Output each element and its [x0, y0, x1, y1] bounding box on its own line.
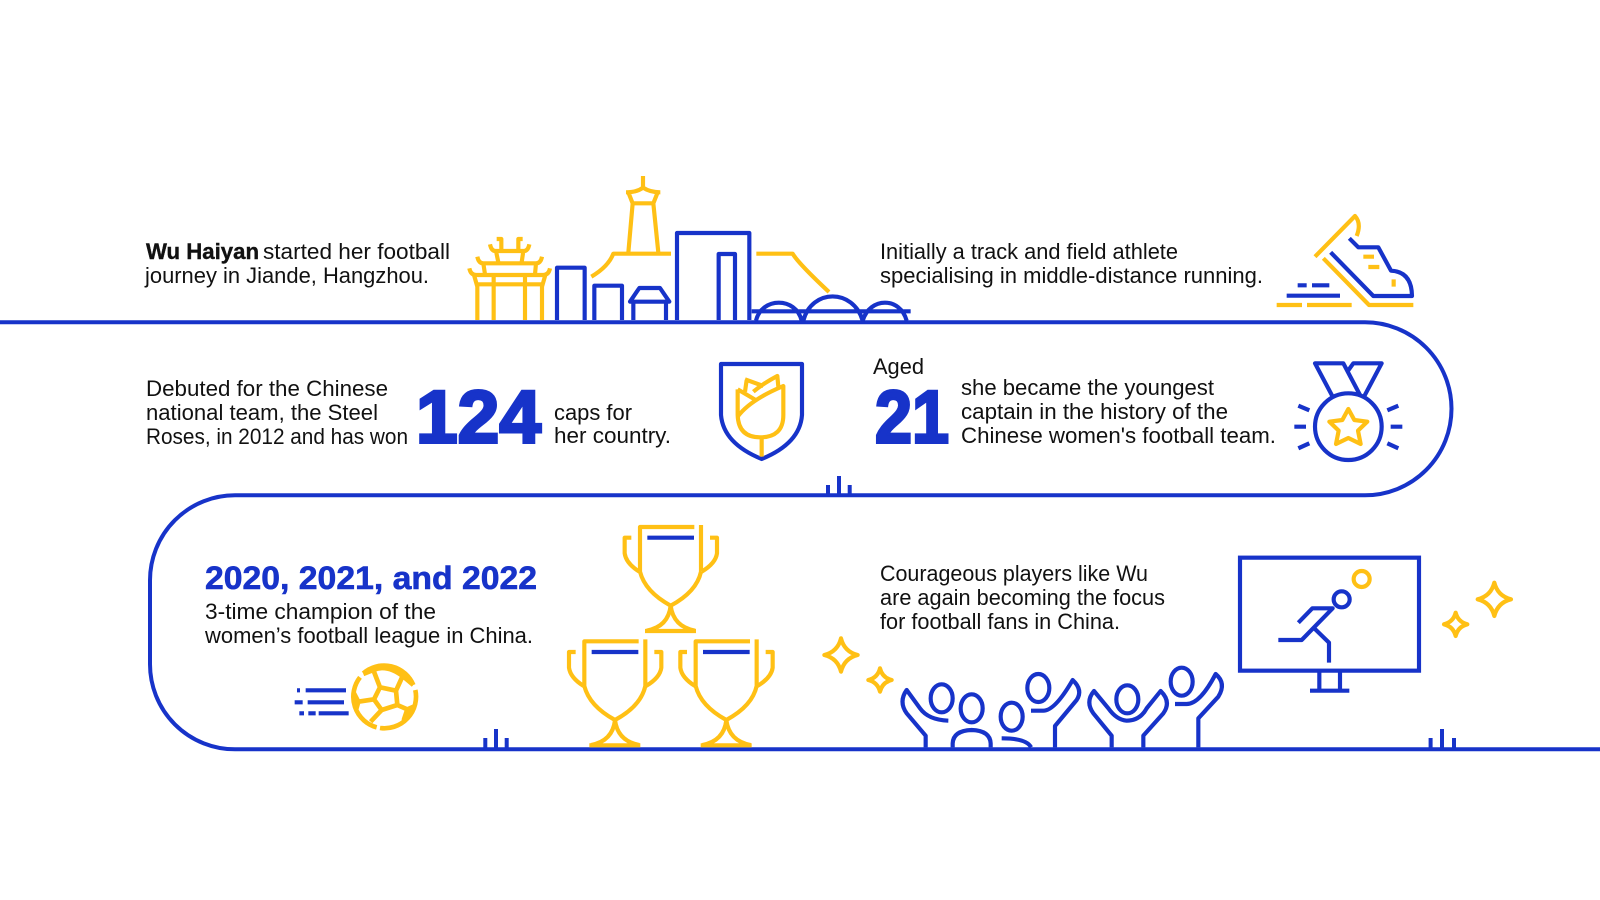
- text: 3-time champion: [204, 599, 533, 648]
- icon: sparkles right: [1444, 583, 1511, 636]
- icon: cheering fans: [902, 668, 1222, 747]
- stat: 124 caps: 124: [416, 376, 541, 458]
- icon: running shoe: [1277, 216, 1413, 305]
- text: Jiande intro: Wu Haiyan: [146, 239, 259, 264]
- icon: Hangzhou skyline: [469, 176, 911, 321]
- yellow gate: [469, 239, 550, 320]
- text: youngest captain: she became the youngest: [961, 375, 1215, 400]
- icon: grass ticks lower right: [1431, 729, 1454, 748]
- text: debut: Roses, in 2012 and has won: [146, 424, 408, 449]
- yellow pagoda and hills: [591, 176, 829, 292]
- icon: three trophies: [569, 525, 773, 745]
- blue bridge: [752, 296, 911, 321]
- text: youngest captain: captain in the history of the: [961, 399, 1228, 424]
- text: Jiande intro: started her football: [263, 239, 450, 264]
- text: youngest captain: [961, 375, 1276, 448]
- text: 3-time champion: women’s football league in China.: [204, 623, 533, 648]
- text: courageous players: Courageous players like Wu: [880, 561, 1148, 586]
- text: debut: Debuted for the Chinese: [146, 376, 388, 401]
- text: aged label: Aged: [873, 354, 924, 379]
- text: Jiande intro: [144, 239, 450, 288]
- heading: championship years: 2020, 2021, and 2022: [205, 560, 537, 596]
- icon: grass ticks lower left: [485, 729, 507, 748]
- text: caps for her country: [554, 400, 671, 448]
- text: debut: [146, 376, 408, 449]
- icon: sparkles left: [824, 638, 892, 692]
- blue buildings: [557, 233, 749, 320]
- text: courageous players: are again becoming the focus: [880, 585, 1165, 610]
- text: track and field: specialising in middle-distance running.: [880, 263, 1263, 288]
- icon: rose shield: [721, 364, 802, 459]
- top trophy: [625, 525, 717, 631]
- text: debut: national team, the Steel: [146, 400, 378, 425]
- stat: 21 years: 21: [875, 376, 949, 458]
- icon: TV with footballer: [1240, 558, 1419, 691]
- text: Jiande intro: journey in Jiande, Hangzhou.: [144, 263, 429, 288]
- text: caps for her country: her country.: [554, 423, 671, 448]
- icon: football with speed lines: [295, 666, 416, 728]
- text: courageous players: [880, 561, 1165, 634]
- text: courageous players: for football fans in China.: [880, 609, 1120, 634]
- winding timeline path: [0, 322, 1600, 749]
- text: caps for her country: caps for: [554, 400, 632, 425]
- left trophy: [569, 639, 661, 745]
- text: track and field: [880, 239, 1263, 288]
- text: track and field: Initially a track and field athlete: [880, 239, 1178, 264]
- icon: grass ticks middle: [828, 476, 850, 494]
- text: 3-time champion: 3-time champion of the: [205, 599, 436, 624]
- right trophy: [680, 639, 773, 745]
- icon: medal: [1294, 363, 1402, 460]
- text: youngest captain: Chinese women's football team.: [961, 423, 1276, 448]
